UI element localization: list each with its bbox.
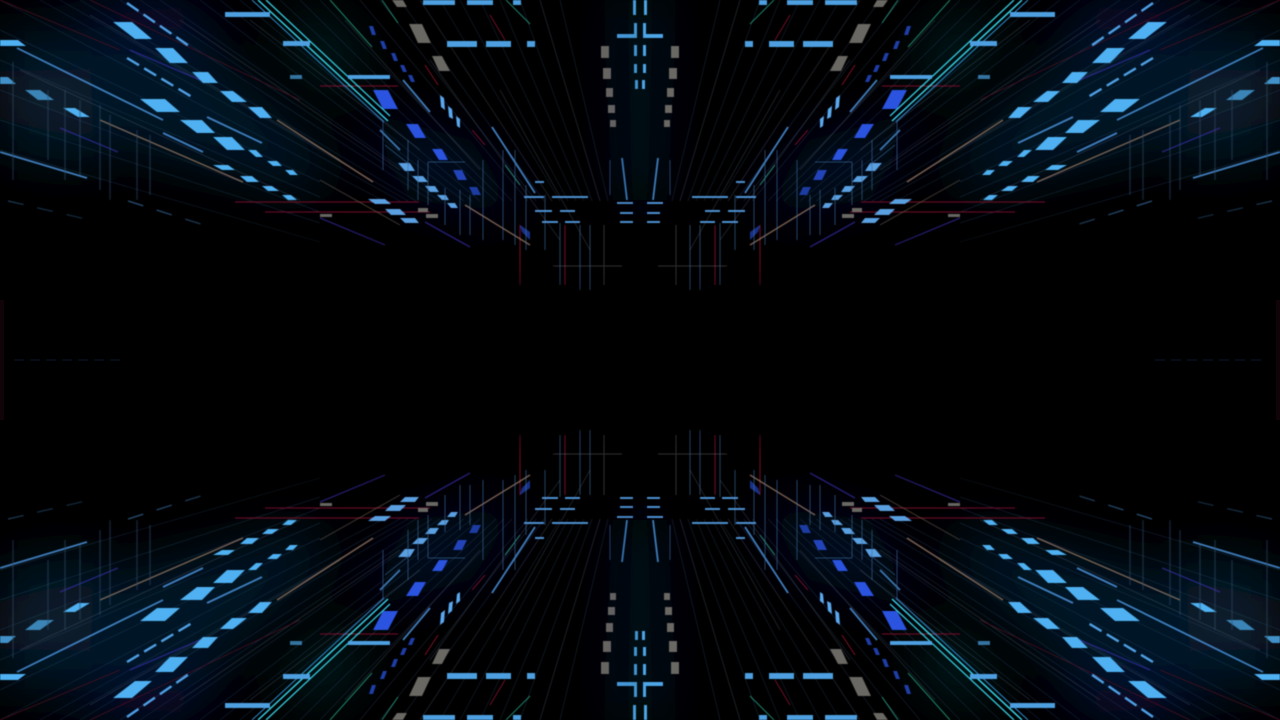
- panel: bottom-left quadrant: [0, 360, 640, 720]
- panel: bottom-right quadrant: [640, 360, 1280, 720]
- panel: top-left quadrant: [0, 0, 640, 360]
- faint side lights: [0, 300, 1280, 420]
- panel: top-right quadrant: [640, 0, 1280, 360]
